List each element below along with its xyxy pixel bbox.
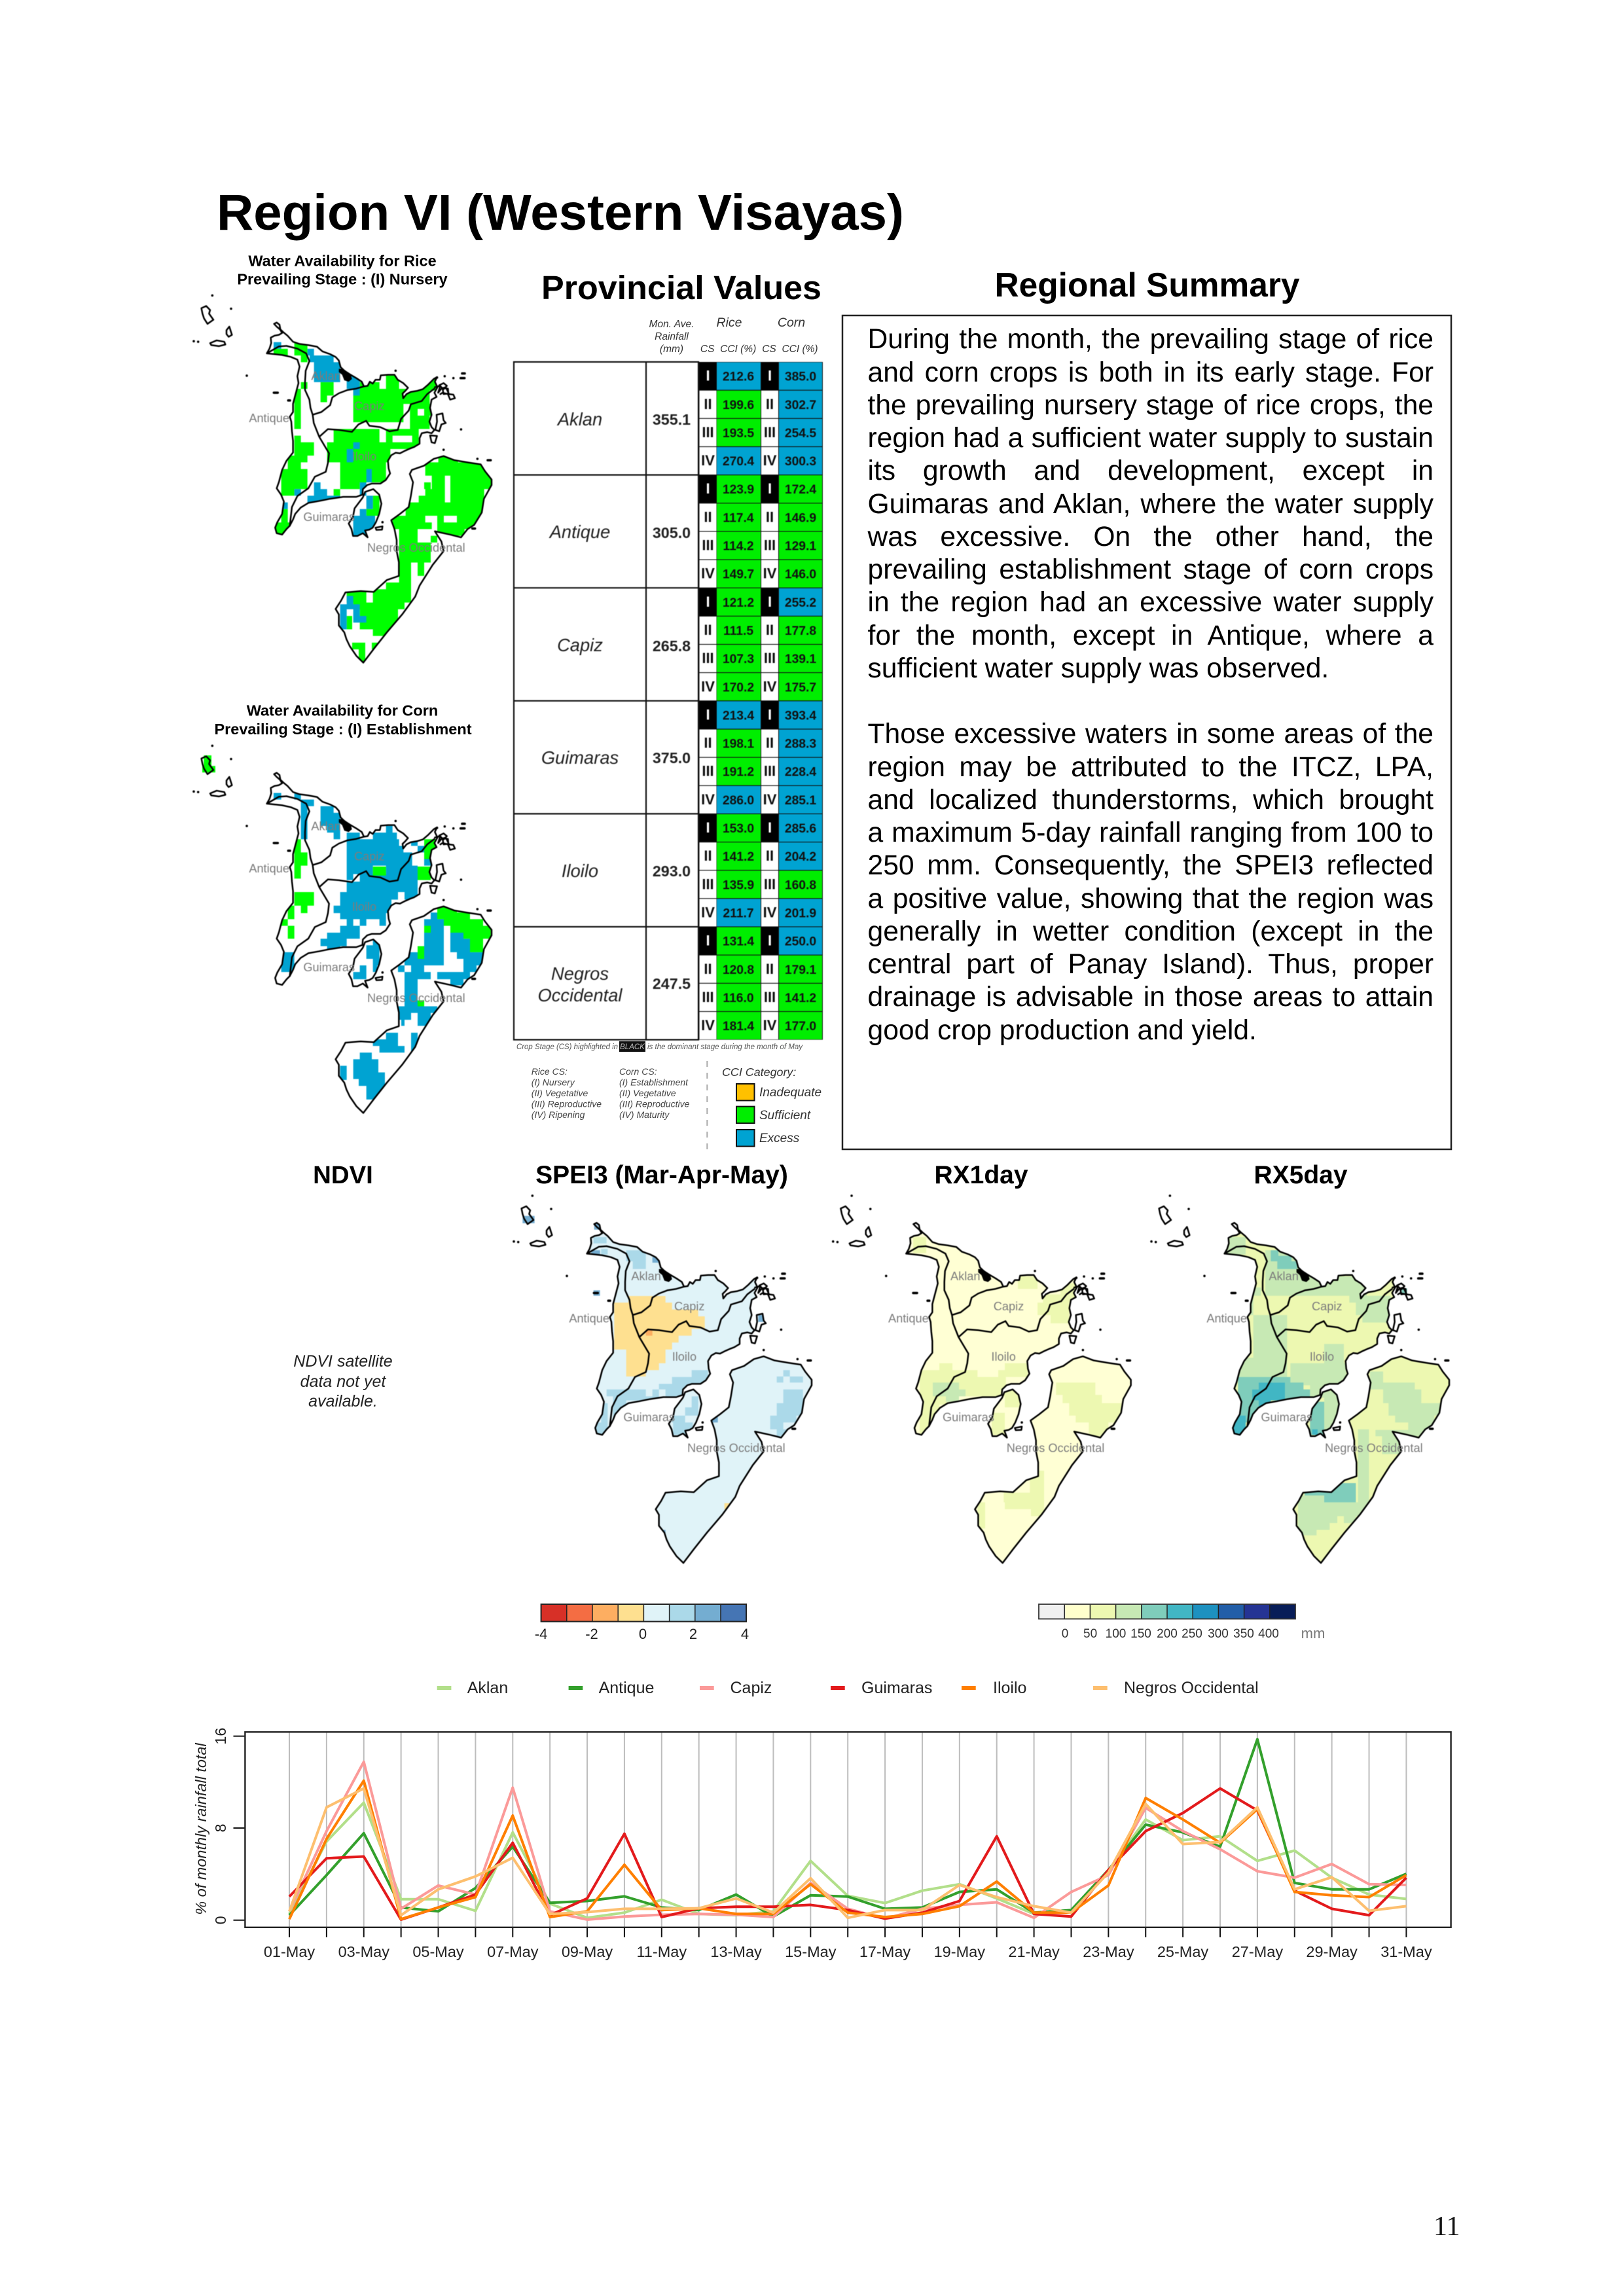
row group: Guimaras: 191.2 — [723, 766, 754, 780]
row group: Capiz: 139.1 — [785, 653, 816, 666]
row group: Negros Occidental: 120.8 — [723, 963, 754, 977]
series: Negros Occidental — [289, 1788, 1406, 1918]
footnote: crop stage: is the dominant stage during the month of May — [647, 1043, 803, 1051]
row group: Guimaras: 228.4 — [785, 766, 816, 780]
y axis labels: 0 — [212, 1916, 229, 1924]
row group: Aklan: IV — [701, 452, 715, 469]
row group: Antique: 146.0 — [785, 568, 816, 582]
table headers: Mon. Ave. — [649, 319, 694, 330]
province labels: Guimaras — [623, 1411, 675, 1424]
row group: Antique: 129.1 — [785, 539, 816, 554]
row group: Antique: IV — [701, 565, 715, 582]
colour bar: SPEI3: 2 — [689, 1626, 697, 1642]
row group: Antique: 305.0 — [653, 524, 691, 541]
row group: Guimaras: Guimaras — [541, 747, 619, 768]
text block: regional summary: good crop production and yield. — [868, 1014, 1257, 1046]
text block: regional summary: Those excessive waters in some areas of the — [868, 718, 1434, 749]
row group: Antique: 149.7 — [723, 568, 754, 582]
map: rice water availability — [194, 295, 492, 663]
province labels: Negros Occidental — [1325, 1441, 1423, 1454]
panel: regional summary box — [842, 315, 1451, 1149]
province labels — [888, 1270, 1104, 1454]
legend: rice crop stages: Rice CS: — [532, 1066, 568, 1077]
legend: rice crop stages: (III) Reproductive — [532, 1098, 602, 1109]
row group: Guimaras: IV — [763, 791, 777, 808]
province labels: Antique — [1206, 1312, 1247, 1325]
province labels: Antique — [249, 412, 289, 425]
x axis labels: 11-May — [636, 1943, 687, 1960]
legend: CCI category — [722, 1066, 821, 1147]
row group: Capiz: I — [768, 594, 772, 610]
row group: Iloilo: III — [702, 876, 714, 892]
x axis labels: 31-May — [1380, 1943, 1432, 1960]
heading: SPEI3: SPEI3 (Mar-Apr-May) — [535, 1161, 788, 1189]
row group: Antique — [549, 475, 822, 588]
chart legend: Negros Occidental — [1124, 1679, 1259, 1697]
row group: Guimaras: 198.1 — [723, 738, 754, 751]
row group: Guimaras: 286.0 — [723, 794, 754, 808]
province labels: Iloilo — [1310, 1350, 1334, 1363]
row group: Negros Occidental: 179.1 — [785, 963, 816, 977]
province labels: Aklan — [631, 1270, 661, 1283]
row group: Antique: III — [764, 537, 776, 554]
heading: NDVI: NDVI — [313, 1161, 373, 1189]
x axis labels — [264, 1943, 1432, 1960]
icon: small green island patch — [202, 755, 215, 772]
province labels — [569, 1270, 785, 1454]
row group: Iloilo: 201.9 — [785, 906, 816, 920]
row group: Guimaras: I — [768, 706, 772, 723]
row group: Aklan: 199.6 — [723, 399, 754, 412]
row group: Antique: 123.9 — [723, 483, 754, 497]
row group: Negros Occidental: 116.0 — [723, 992, 754, 1005]
text block: regional summary: a maximum 5-day rainfall ranging from 100 to — [868, 817, 1434, 848]
heading: RX5day: RX5day — [1254, 1161, 1348, 1189]
text block: regional summary: for the month, except in Antique, where a — [868, 620, 1434, 651]
colour bar: rainfall mm: 200 — [1157, 1627, 1178, 1641]
heading: corn water availability: Prevailing Stage : (I) Establishment — [214, 721, 472, 738]
heading: provincial values: Provincial Values — [541, 269, 821, 306]
text block: regional summary: prevailing establishment stage of corn crops — [868, 554, 1434, 585]
row group: Guimaras: II — [704, 735, 712, 751]
footnote: crop stage — [516, 1041, 803, 1052]
row group: Negros Occidental: 250.0 — [785, 935, 816, 949]
table headers: CS — [700, 344, 715, 355]
province labels: Negros Occidental — [687, 1441, 785, 1454]
province labels: Guimaras — [1261, 1411, 1312, 1424]
row group: Aklan: III — [702, 424, 714, 440]
chart legend — [437, 1679, 1259, 1697]
row group: Capiz: IV — [763, 678, 777, 694]
province labels: Antique — [569, 1312, 609, 1325]
text block: regional summary: in the region had an excessive water supply — [868, 586, 1434, 618]
province labels — [1206, 1270, 1423, 1454]
text block: regional summary — [868, 323, 1434, 1046]
x axis labels: 21-May — [1008, 1943, 1060, 1960]
text block: regional summary: drainage is advisable in those areas to attain — [868, 981, 1434, 1013]
row group: Negros Occidental: IV — [763, 1017, 777, 1033]
heading: corn water availability: Water Availability for Corn — [247, 702, 438, 719]
row group: Iloilo: 211.7 — [723, 906, 754, 920]
table headers — [649, 315, 818, 355]
row group: Negros Occidental: Occidental — [538, 985, 623, 1005]
legend: rice crop stages: (I) Nursery — [532, 1077, 575, 1088]
row group: Iloilo: IV — [701, 904, 715, 920]
province labels: Negros Occidental — [367, 541, 465, 554]
row group: Iloilo: 204.2 — [785, 850, 816, 864]
row group: Capiz: Capiz — [557, 635, 603, 655]
province labels — [249, 369, 465, 554]
y axis labels — [212, 1728, 229, 1924]
text block: regional summary: and localized thunderstorms, which brought — [868, 784, 1434, 816]
x axis labels: 07-May — [487, 1943, 539, 1960]
province labels: Aklan — [950, 1270, 980, 1283]
table headers: (mm) — [660, 344, 683, 355]
row group: Capiz: 255.2 — [785, 596, 816, 610]
colour bar: SPEI3: 4 — [741, 1626, 749, 1642]
row group: Capiz: 177.8 — [785, 624, 816, 638]
colour bar: rainfall mm: 250 — [1182, 1627, 1202, 1641]
row group: Antique: II — [766, 509, 774, 525]
row group: Antique: Antique — [549, 522, 610, 542]
text block: regional summary: 250 mm. Consequently, the SPEI3 reflected — [868, 850, 1434, 881]
province labels: Guimaras — [303, 511, 355, 524]
province labels: Capiz — [994, 1300, 1024, 1313]
heading: rice water availability: Water Availability for Rice — [248, 253, 437, 270]
colour bar: SPEI3: -2 — [585, 1626, 598, 1642]
island colour patch — [1401, 1288, 1407, 1295]
colour bar: rainfall mm: 150 — [1130, 1627, 1151, 1641]
province labels: Iloilo — [991, 1350, 1016, 1363]
legend: CCI category: Sufficient — [759, 1109, 811, 1122]
row group: Iloilo: 293.0 — [653, 863, 691, 880]
chart legend: Guimaras — [861, 1679, 932, 1697]
legend: corn crop stages: (III) Reproductive — [619, 1098, 690, 1109]
map: RX1day — [831, 1194, 1132, 1564]
series: Aklan — [289, 1803, 1406, 1918]
legend: corn crop stages: (II) Vegetative — [619, 1088, 676, 1098]
province labels: Iloilo — [352, 450, 376, 463]
row group: Aklan: II — [704, 396, 712, 412]
text: NDVI note: data not yet — [300, 1372, 386, 1391]
province labels: Iloilo — [352, 901, 376, 914]
table headers: Corn — [778, 315, 805, 330]
province labels: Iloilo — [672, 1350, 696, 1363]
row group: Iloilo: IV — [763, 904, 777, 920]
row group: Capiz: I — [706, 594, 710, 610]
heading: RX1day: RX1day — [934, 1161, 1028, 1189]
island colour patches — [522, 1216, 764, 1322]
text block: regional summary: region had a sufficient water supply to sustain — [868, 422, 1434, 454]
row group: Negros Occidental: I — [706, 933, 710, 949]
colour bar: rainfall mm: 50 — [1083, 1627, 1097, 1641]
x axis labels: 27-May — [1232, 1943, 1283, 1960]
table: provincial values — [514, 362, 823, 1040]
legend: rice crop stages: (IV) Ripening — [532, 1109, 585, 1120]
table headers: Rainfall — [655, 331, 689, 342]
row group: Negros Occidental: 247.5 — [653, 975, 691, 992]
row group: Negros Occidental: Negros — [551, 963, 609, 984]
table headers: CCI (%) — [782, 344, 818, 355]
y axis labels: 16 — [212, 1728, 229, 1745]
row group: Negros Occidental: 181.4 — [723, 1020, 754, 1033]
row group: Iloilo: I — [706, 819, 710, 836]
row group: Aklan: I — [706, 368, 710, 384]
text block: regional summary: During the month, the prevailing stage of rice — [868, 323, 1434, 355]
text block: regional summary: a positive value, showing that the region was — [868, 883, 1434, 914]
row group: Iloilo: 285.6 — [785, 822, 816, 836]
title: Region VI (Western Visayas) — [217, 185, 904, 241]
text block: regional summary: central part of Panay Island). Thus, proper — [868, 948, 1434, 980]
row group: Iloilo: 141.2 — [723, 850, 754, 864]
colour bar: SPEI3: -4 — [535, 1626, 547, 1642]
row group: Antique: IV — [763, 565, 777, 582]
text block: regional summary: region may be attributed to the ITCZ, LPA, — [868, 751, 1434, 783]
chart legend: Iloilo — [993, 1679, 1026, 1697]
row group: Aklan: 300.3 — [785, 455, 816, 469]
row group: Negros Occidental: 141.2 — [785, 992, 816, 1005]
province labels: Capiz — [1312, 1300, 1342, 1313]
colour bar: SPEI3 — [535, 1604, 749, 1642]
colour bar: rainfall mm: 300 — [1208, 1627, 1229, 1641]
x axis labels: 15-May — [785, 1943, 837, 1960]
province labels: Capiz — [354, 399, 385, 412]
row group: Guimaras: 285.1 — [785, 794, 816, 808]
x axis labels: 19-May — [934, 1943, 985, 1960]
row group: Negros Occidental: 177.0 — [785, 1020, 816, 1033]
text block: regional summary: was excessive. On the other hand, the — [868, 521, 1434, 552]
row group: Aklan: 270.4 — [723, 455, 754, 469]
legend: corn crop stages: (I) Establishment — [619, 1077, 689, 1088]
row group: Antique: II — [704, 509, 712, 525]
row group: Aklan: 212.6 — [723, 370, 754, 384]
text block: regional summary: and corn crops is both in its early stage. For — [868, 357, 1434, 388]
row group: Iloilo: Iloilo — [562, 861, 598, 881]
row group: Guimaras: 213.4 — [723, 709, 754, 723]
row group: Iloilo: II — [766, 848, 774, 864]
row group: Antique: 117.4 — [723, 511, 754, 525]
row group: Aklan: I — [768, 368, 772, 384]
row group: Negros Occidental: III — [702, 989, 714, 1005]
row group: Iloilo: 153.0 — [723, 822, 754, 836]
footnote: crop stage: BLACK — [620, 1043, 645, 1051]
colour bar: rainfall mm: 100 — [1106, 1627, 1126, 1641]
province labels: Capiz — [674, 1300, 704, 1313]
row group: Iloilo: III — [764, 876, 776, 892]
row group: Capiz: III — [702, 650, 714, 666]
chart legend: Antique — [599, 1679, 654, 1697]
colour bar: rainfall mm: 0 — [1062, 1627, 1068, 1641]
province labels: Guimaras — [943, 1411, 994, 1424]
text: NDVI note: available. — [308, 1392, 378, 1410]
page number: 11 — [1434, 2212, 1460, 2242]
row group: Antique: III — [702, 537, 714, 554]
row group: Capiz: 121.2 — [723, 596, 754, 610]
colour bar: rainfall mm: mm — [1301, 1625, 1325, 1641]
heading: rice water availability: Prevailing Stage : (I) Nursery — [237, 271, 448, 288]
row group: Iloilo — [562, 814, 822, 926]
province labels: Capiz — [354, 850, 385, 863]
y axis labels: 8 — [212, 1823, 229, 1833]
y axis title: % of monthly rainfall total — [192, 1742, 209, 1915]
heading: regional summary: Regional Summary — [995, 266, 1300, 304]
row group: Capiz: 265.8 — [653, 637, 691, 655]
row group: Guimaras: 393.4 — [785, 709, 816, 723]
row group: Guimaras: III — [764, 763, 776, 780]
row group: Antique: I — [768, 480, 772, 497]
row group: Aklan: 302.7 — [785, 399, 816, 412]
province labels: Guimaras — [303, 961, 355, 974]
row group: Aklan: 355.1 — [653, 411, 691, 428]
row group: Iloilo: 160.8 — [785, 878, 816, 892]
province labels: Aklan — [1269, 1270, 1299, 1283]
row group: Guimaras: 375.0 — [653, 749, 691, 766]
province labels: Aklan — [311, 819, 341, 833]
row group: Negros Occidental: II — [766, 961, 774, 977]
x axis labels: 01-May — [264, 1943, 315, 1960]
series: Capiz — [289, 1762, 1406, 1920]
legend: CCI category: CCI Category: — [722, 1066, 796, 1079]
x axis labels: 25-May — [1157, 1943, 1208, 1960]
footnote: crop stage: Crop Stage (CS) highlighted in — [516, 1043, 618, 1051]
province labels — [249, 819, 465, 1005]
row group: Antique: I — [706, 480, 710, 497]
row group: Negros Occidental: II — [704, 961, 712, 977]
text block: regional summary: Guimaras and Aklan, where the water supply — [868, 488, 1434, 520]
table headers: CCI (%) — [720, 344, 756, 355]
map: SPEI3 — [512, 1194, 813, 1564]
line chart: daily share of monthly rainfall — [192, 1728, 1451, 1960]
text block: regional summary: the prevailing nursery stage of rice crops, the — [868, 389, 1434, 421]
row group: Antique: 114.2 — [723, 539, 754, 554]
row group: Aklan: 385.0 — [785, 370, 816, 384]
legend: CCI category: Inadequate — [759, 1086, 821, 1100]
row group: Negros Occidental — [538, 927, 822, 1039]
row group: Iloilo: I — [768, 819, 772, 836]
row group: Guimaras: III — [702, 763, 714, 780]
legend: rice crop stages — [532, 1066, 602, 1120]
legend: corn crop stages — [619, 1066, 690, 1120]
x axis labels: 09-May — [562, 1943, 613, 1960]
heading: rice water availability — [237, 253, 448, 288]
row group: Guimaras: IV — [701, 791, 715, 808]
legend: rice crop stages: (II) Vegetative — [532, 1088, 588, 1098]
row group: Capiz: 175.7 — [785, 681, 816, 694]
chart legend: Capiz — [731, 1679, 772, 1697]
row group: Negros Occidental: I — [768, 933, 772, 949]
text: NDVI note: NDVI satellite — [293, 1352, 393, 1371]
text block: regional summary: generally in wetter condition (except in the — [868, 916, 1434, 947]
row group: Capiz: 170.2 — [723, 681, 754, 694]
row group: Antique: 172.4 — [785, 483, 816, 497]
row group: Guimaras: 288.3 — [785, 738, 816, 751]
row group: Negros Occidental: 131.4 — [723, 935, 754, 949]
row group: Capiz: 111.5 — [723, 624, 753, 638]
colour bar: rainfall mm: 400 — [1258, 1627, 1279, 1641]
table headers: Rice — [716, 315, 742, 330]
x axis labels: 05-May — [412, 1943, 464, 1960]
row group: Capiz: 107.3 — [723, 653, 754, 666]
text: NDVI note — [293, 1352, 393, 1410]
heading: corn water availability — [214, 702, 472, 738]
row group: Aklan: 254.5 — [785, 427, 816, 440]
province labels: Antique — [249, 862, 289, 875]
row group: Guimaras — [541, 701, 822, 814]
series: Antique — [289, 1739, 1406, 1916]
row group: Aklan: 193.5 — [723, 427, 754, 440]
table headers: CS — [762, 344, 776, 355]
province labels: Aklan — [311, 369, 341, 382]
province labels: Antique — [888, 1312, 929, 1325]
row group: Iloilo: 135.9 — [723, 878, 754, 892]
row group: Capiz: II — [766, 622, 774, 638]
row group: Aklan: III — [764, 424, 776, 440]
row group: Iloilo: II — [704, 848, 712, 864]
colour bar: rainfall mm: 350 — [1233, 1627, 1254, 1641]
colour bar: rainfall mm — [1039, 1604, 1325, 1641]
x axis labels: 17-May — [859, 1943, 911, 1960]
chart legend: Aklan — [467, 1679, 508, 1697]
x axis labels: 03-May — [338, 1943, 389, 1960]
x axis labels: 29-May — [1306, 1943, 1358, 1960]
row group: Antique: 146.9 — [785, 511, 816, 525]
legend: corn crop stages: Corn CS: — [619, 1066, 657, 1077]
map: corn water availability — [194, 745, 492, 1113]
legend: corn crop stages: (IV) Maturity — [619, 1109, 670, 1120]
legend: CCI category: Excess — [759, 1132, 800, 1145]
row group: Capiz — [557, 588, 822, 700]
series: Guimaras — [289, 1788, 1406, 1920]
row group: Negros Occidental: IV — [701, 1017, 715, 1033]
text block: regional summary: sufficient water supply was observed. — [868, 653, 1329, 684]
x axis labels: 23-May — [1083, 1943, 1134, 1960]
x axis labels: 13-May — [710, 1943, 762, 1960]
row group: Guimaras: I — [706, 706, 710, 723]
map: RX5day — [1149, 1194, 1451, 1564]
row group: Aklan — [556, 363, 822, 475]
row group: Aklan: II — [766, 396, 774, 412]
row group: Aklan: Aklan — [556, 409, 602, 429]
province labels: Negros Occidental — [367, 992, 465, 1005]
text block: regional summary: its growth and development, except in — [868, 455, 1434, 486]
row group: Aklan: IV — [763, 452, 777, 469]
row group: Capiz: III — [764, 650, 776, 666]
colour bar: SPEI3: 0 — [639, 1626, 647, 1642]
row group: Guimaras: II — [766, 735, 774, 751]
row group: Negros Occidental: III — [764, 989, 776, 1005]
province labels: Negros Occidental — [1007, 1441, 1104, 1454]
row group: Capiz: II — [704, 622, 712, 638]
row group: Capiz: IV — [701, 678, 715, 694]
series: Iloilo — [289, 1781, 1406, 1919]
